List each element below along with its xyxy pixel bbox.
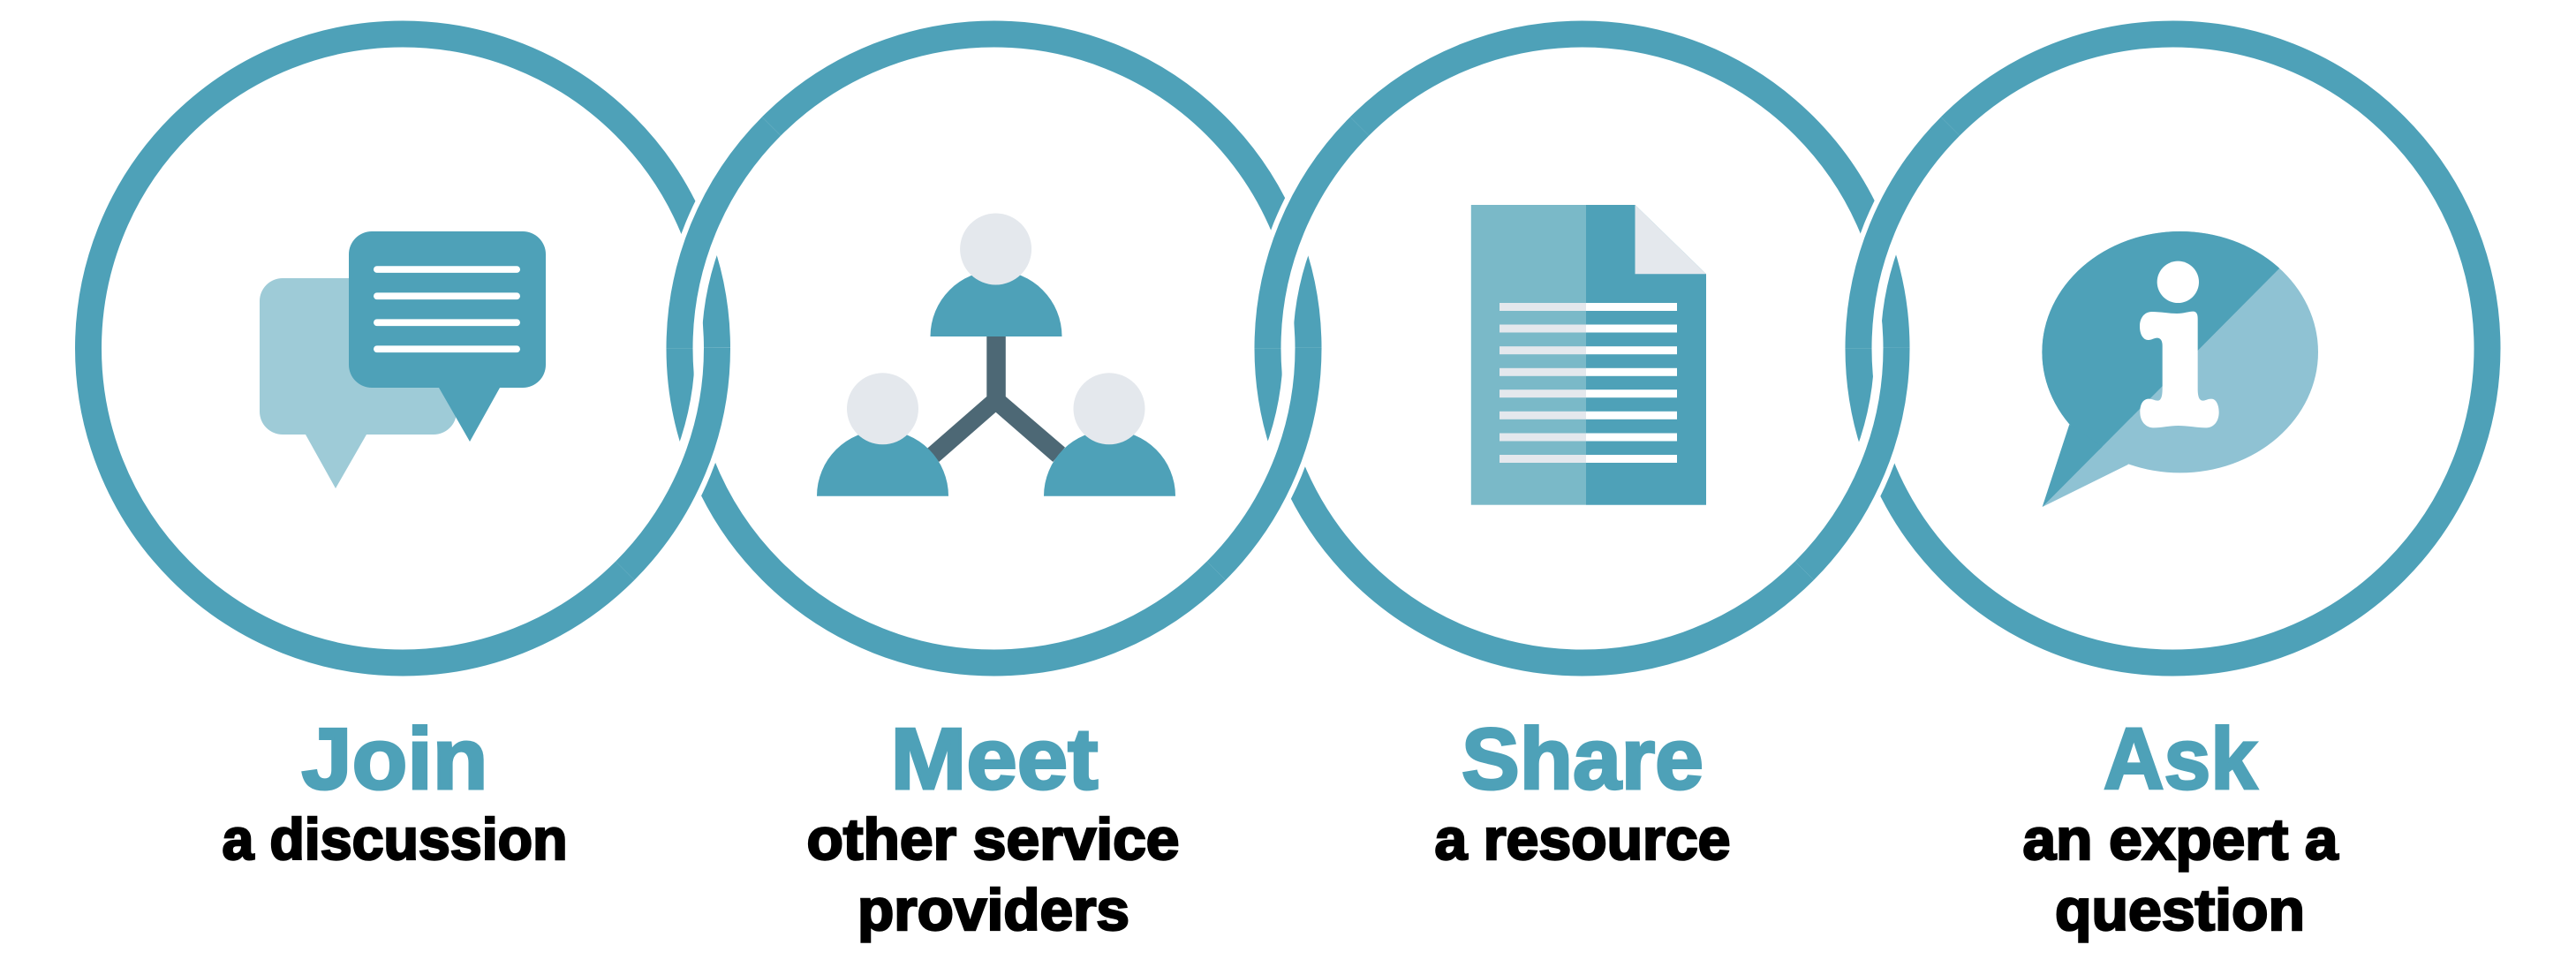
label: meet (807, 710, 1180, 942)
weave: ask over share at top (1858, 34, 2487, 662)
folded corner (1635, 205, 1706, 274)
connector (927, 336, 1065, 462)
letter i (2140, 261, 2219, 427)
text: other service providers: providers (857, 877, 1129, 942)
interlocking rings (88, 34, 2487, 662)
weave: share over meet at top (1268, 34, 1897, 662)
label: join (223, 710, 567, 872)
weave: join over meet at bottom (88, 34, 717, 662)
text: an expert a question: question (2055, 877, 2305, 942)
icon: information speech bubble (2042, 231, 2318, 507)
document right half (1586, 205, 1706, 505)
weave: meet over join at top (680, 34, 1309, 662)
bubble: dark part (2042, 231, 2280, 507)
weave: share over ask at bottom (1268, 34, 1897, 662)
text: an expert a question: an expert a (2022, 806, 2339, 872)
text: a discussion: a discussion (223, 806, 567, 872)
message lines (374, 266, 520, 352)
icon: document (1471, 205, 1706, 505)
text lines: left (1500, 303, 1586, 463)
label: share (1434, 710, 1731, 872)
text lines: right (1586, 303, 1677, 463)
document left half (1471, 205, 1586, 505)
weave: meet over share at bottom (680, 34, 1309, 662)
text: an expert a question (2022, 806, 2339, 942)
ring: share (1268, 34, 1897, 662)
heading: Share: Share (1462, 710, 1703, 807)
person: right (1044, 373, 1175, 496)
heading: Ask: Ask (2104, 710, 2257, 807)
text: other service providers: other service (807, 806, 1180, 872)
ring: ask (1858, 34, 2487, 662)
text: a resource: a resource (1434, 806, 1731, 872)
icon: chat bubbles (260, 231, 546, 488)
label: ask (2022, 710, 2339, 942)
bubble: light part (2042, 231, 2318, 507)
ring: meet (680, 34, 1309, 662)
front speech bubble (349, 231, 546, 442)
text: other service providers (807, 806, 1180, 942)
back speech bubble (260, 278, 457, 488)
heading: Join: Join (302, 710, 487, 807)
icon: connected people (817, 214, 1175, 496)
heading: Meet: Meet (890, 710, 1099, 807)
ring: join (88, 34, 717, 662)
person: left (817, 373, 948, 496)
person: top (931, 214, 1061, 336)
